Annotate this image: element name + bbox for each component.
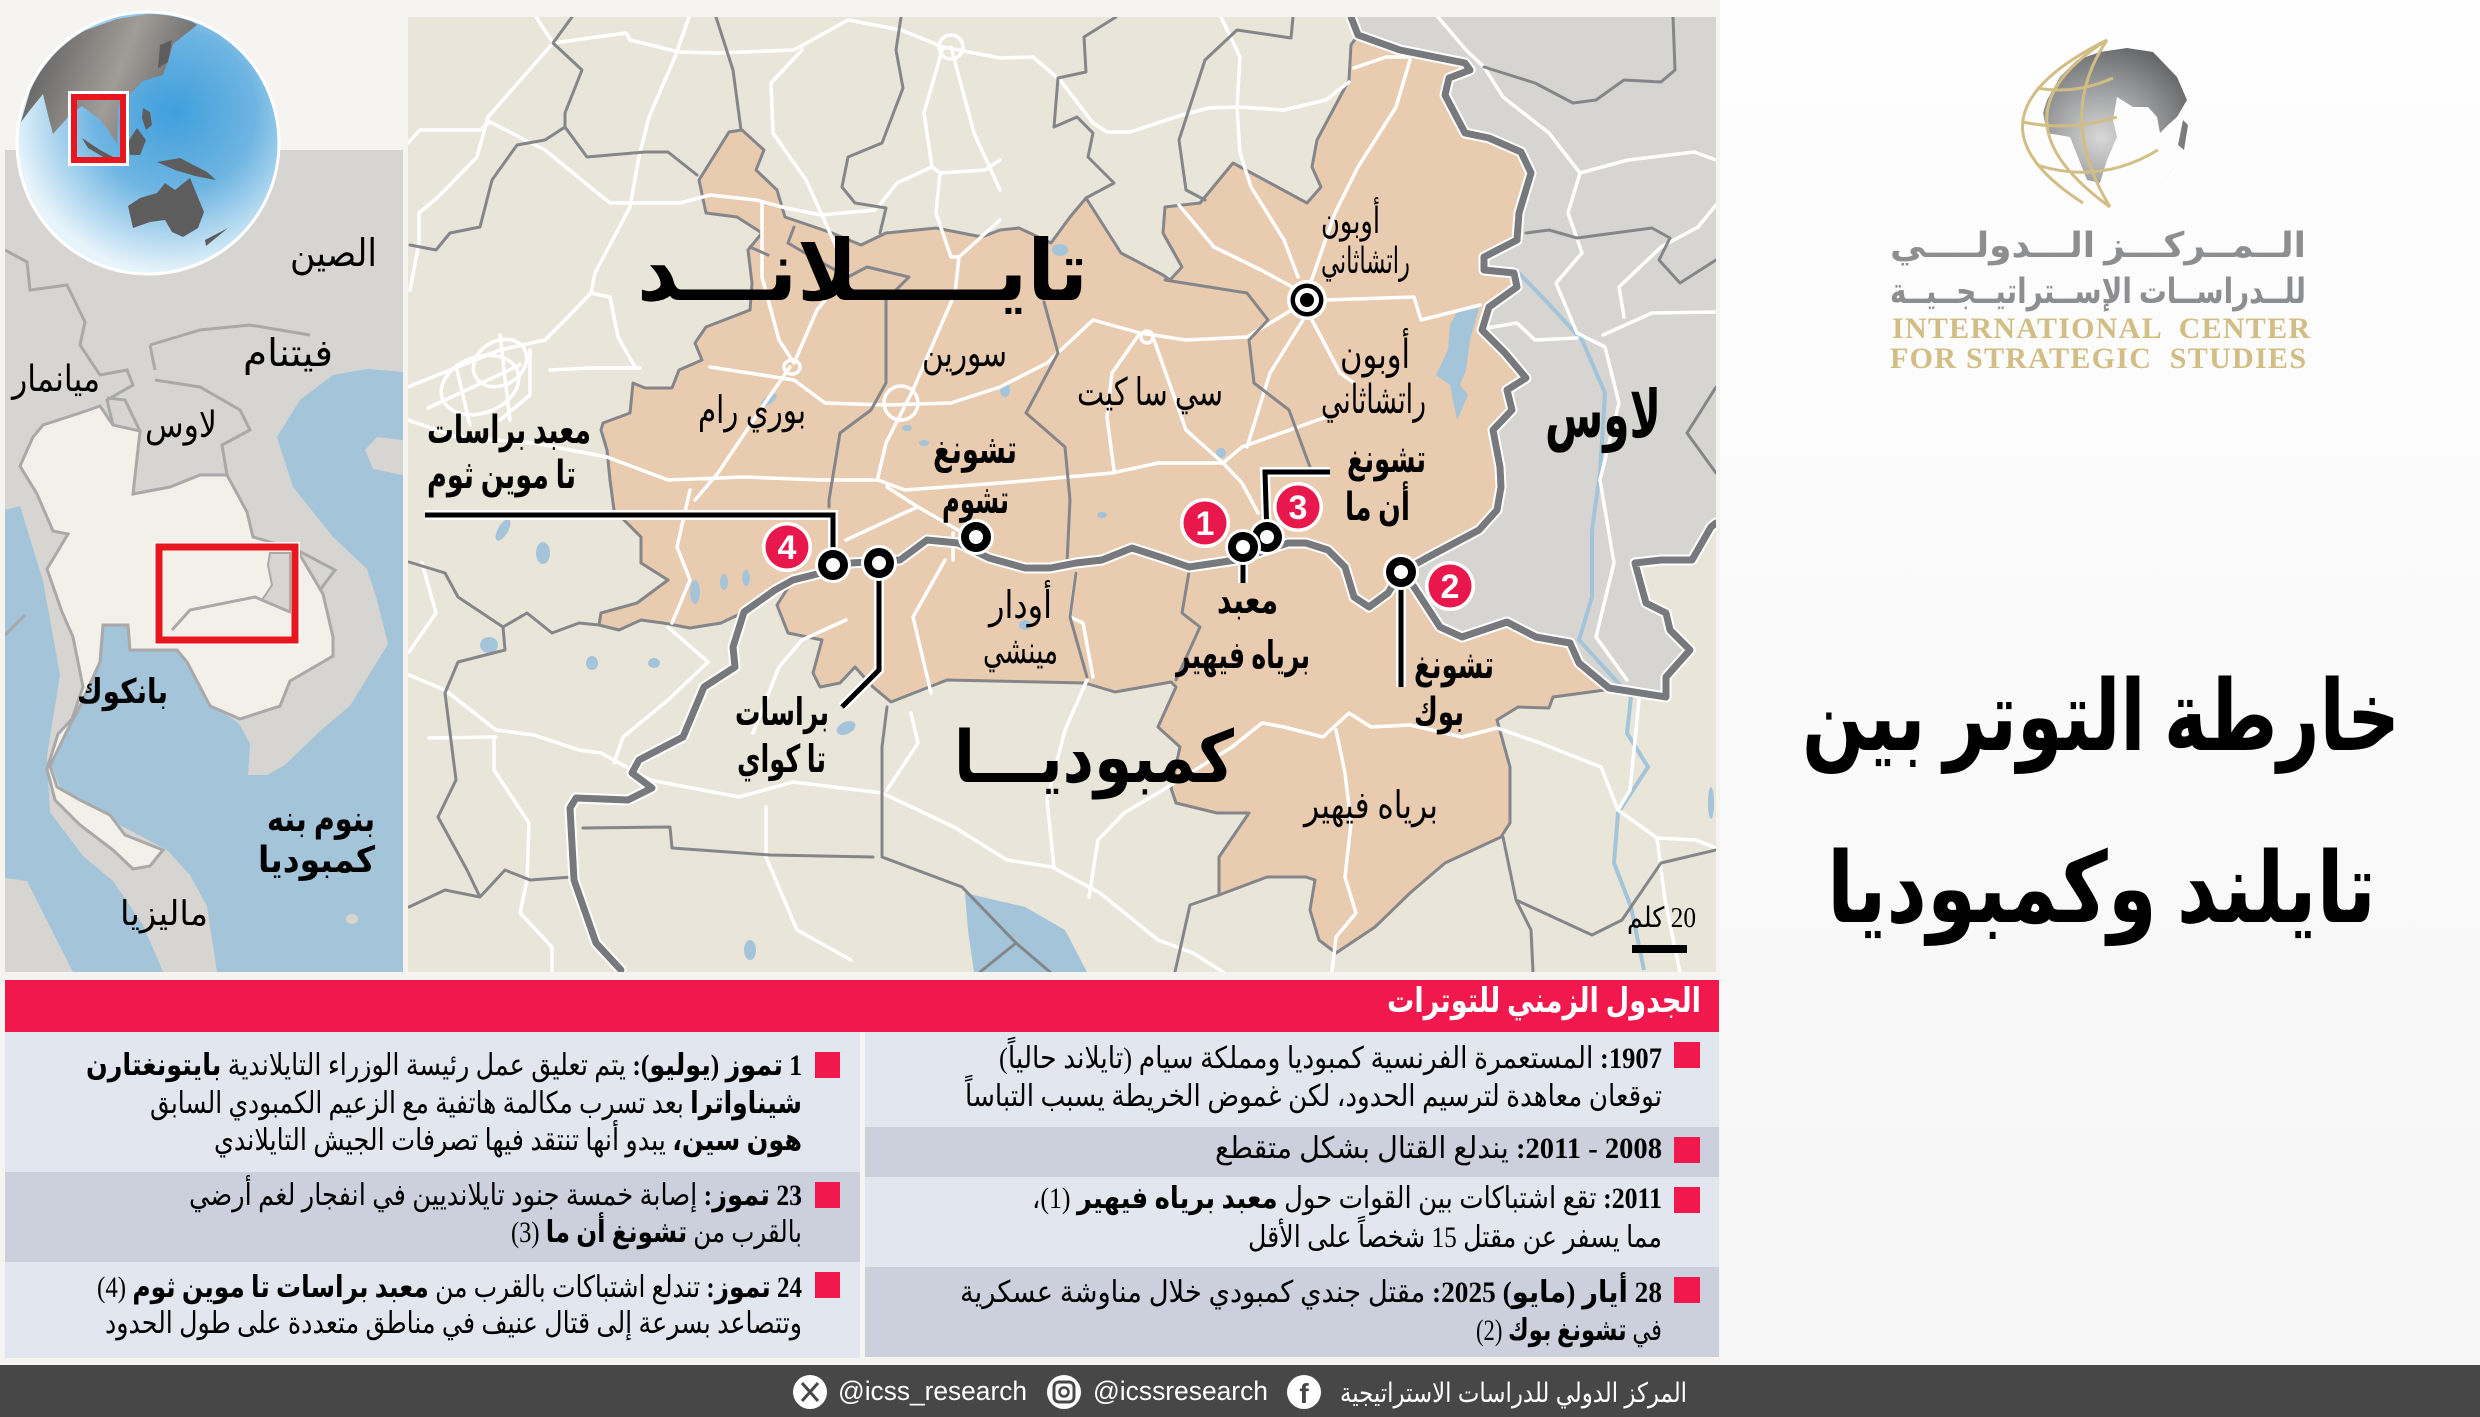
entry: 2008-2011: 2008 - 2011: يندلع القتال بشكل متقطع: [1215, 1132, 1662, 1166]
globe: islands and Australia: [82, 40, 228, 246]
footer: instagram handle: @icssresearch: [1093, 1376, 1268, 1406]
entry: 23 July: بالقرب من تشونغ أن ما (3): [511, 1212, 802, 1249]
scale bar: 20 كلم: [1627, 903, 1696, 934]
entry: 24 July: وتتصاعد بسرعة إلى قتال عنيف في مناطق متعددة على طول الحدود: [105, 1307, 802, 1341]
entry: 1 July: [5, 1032, 860, 1172]
ICSS logo: [1890, 40, 2310, 375]
map label: Prasat Ta Muen Thom temple: معبد براسات: [427, 409, 591, 453]
footer bar: [0, 1365, 2480, 1417]
map label: Prasat Ta Kwai: براسات: [735, 692, 829, 734]
pin: Prasat Ta Muen Thom: [815, 547, 851, 583]
icon: instagram: [1047, 1375, 1081, 1409]
map label: Ubon Ratchathani city: [1321, 197, 1410, 282]
entry: 23 July: [5, 1172, 860, 1262]
entry: 28 May 2025: 28 أيار (مايو) 2025: مقتل جندي كمبودي خلال مناوشة عسكرية: [960, 1272, 1662, 1310]
map label: Cambodia: كمبوديـــا: [954, 718, 1234, 800]
map label: Chong An Ma: أن ما: [1345, 481, 1410, 529]
map label: Prasat Ta Kwai: [735, 692, 829, 781]
logo: Arabic name: [1890, 226, 2306, 312]
map label: Ubon Ratchathani province: راتشاثاني: [1321, 377, 1426, 423]
map label: Ubon Ratchathani city: راتشاثاني: [1321, 241, 1410, 282]
inset: locator rectangle: [157, 545, 297, 642]
footer: X handle: @icss_research: [838, 1376, 1027, 1406]
map label: Surin: سورين: [922, 333, 1007, 376]
icon: X: [793, 1375, 827, 1409]
map label: Chong Chom: تشوم: [942, 477, 1009, 523]
inset label: Laos: لاوس: [145, 405, 217, 446]
inset locator map: [5, 150, 403, 972]
entry: 1907: [865, 1032, 1719, 1127]
map label: Chong Chom: تشونغ: [933, 427, 1017, 473]
inset: Hainan and Vietnam details: [365, 437, 403, 475]
footer: Arabic centre name: المركز الدولي للدراسات الاستراتيجية: [1340, 1378, 1687, 1409]
map: lakes: [480, 244, 1714, 972]
entry: 1907: 1907: المستعمرة الفرنسية كمبوديا ومملكة سيام (تايلاند حالياً): [999, 1036, 1662, 1076]
map label: Prasat Ta Muen Thom temple: تا موين ثوم: [427, 454, 576, 498]
pin: Chong An Ma: [1249, 519, 1285, 555]
globe: [15, 10, 279, 274]
map label: Ubon Ratchathani city: أوبون: [1321, 197, 1380, 242]
map: roads: [408, 17, 1716, 972]
timeline header bar: [5, 980, 1719, 1032]
map: national borders: [570, 17, 1716, 970]
scale bar: [1627, 903, 1696, 953]
entry: 28 May 2025: في تشونغ بوك (2): [1476, 1314, 1662, 1348]
logo: Arabic name: للــدراســات الإســتراتيــجــيــة: [1890, 272, 2306, 312]
leader lines: [425, 472, 1401, 707]
entry: 1 July: شيناواترا بعد تسرب مكالمة هاتفية مع الزعيم الكمبودي السابق: [150, 1087, 802, 1121]
globe: locator rectangle: [70, 93, 127, 164]
main title: [1802, 664, 2400, 947]
icon: facebook: f: [1299, 1378, 1309, 1409]
map label: Chong Bok: [1414, 644, 1494, 735]
globe: Asia landmass: [15, 10, 197, 144]
inset label: Bangkok: بانكوك: [77, 674, 168, 712]
entry: 2011: 2011: تقع اشتباكات بين القوات حول معبد برياه فيهير (1)،: [1032, 1182, 1662, 1216]
inset label: Malaysia: ماليزيا: [120, 896, 208, 934]
entry: 1907: توقعان معاهدة لترسيم الحدود، لكن غموض الخريطة يسبب التباساً: [965, 1074, 1662, 1114]
pin: Chong Bok: [1383, 554, 1419, 590]
logo: English name: FOR STRATEGIC STUDIES: [1890, 342, 2306, 375]
map: highlighted Thai provinces: [599, 35, 1531, 630]
logo: globe: [2022, 40, 2188, 207]
map label: Preah Vihear temple: [1174, 597, 1308, 678]
inset label: Vietnam: فيتنام: [243, 333, 333, 375]
map label: Chong Bok: تشونغ: [1414, 644, 1494, 688]
map label: Chong An Ma: تشونغ: [1347, 438, 1426, 482]
pin: Preah Vihear temple: [1225, 529, 1261, 565]
logo: English name: [1890, 312, 2310, 375]
pin: Prasat Ta Kwai: [861, 545, 897, 581]
entry: 24 July: 24 تموز: تندلع اشتباكات بالقرب من معبد براسات تا موين ثوم (4): [97, 1271, 802, 1305]
map label: Ubon Ratchathani province: أوبون: [1340, 328, 1410, 378]
entry: 2008-2011: [865, 1127, 1719, 1177]
entry: 24 July: [5, 1262, 860, 1358]
Ubon city marker: [1287, 280, 1327, 320]
main map: [408, 17, 1716, 972]
inset label: Myanmar: ميانمار: [10, 359, 100, 400]
map label: Preah Vihear temple: معبد: [1217, 580, 1278, 622]
map label: Ubon Ratchathani province: [1321, 328, 1426, 423]
badge 3: 3: [1289, 489, 1307, 527]
map label: Preah Vihear temple: برياه فيهير: [1175, 635, 1310, 677]
map label: Thailand: تايـــــلانـــد: [637, 226, 1088, 319]
badge 4: 4: [778, 529, 797, 567]
map: Laos territory: [1351, 17, 1716, 697]
map label: Laos: لاوس: [1545, 379, 1661, 454]
badge 4: [762, 522, 812, 572]
timeline: right column: [865, 1032, 1719, 1357]
map label: Prasat Ta Muen Thom temple: [427, 409, 591, 498]
map label: Si Sa Ket: سي سا كيت: [1077, 372, 1223, 414]
timeline: left column: [5, 1032, 860, 1358]
entry: 1 July: 1 تموز (يوليو): يتم تعليق عمل رئيسة الوزراء التايلاندية بايتونغتارن: [86, 1049, 802, 1083]
icon: facebook: [1287, 1375, 1321, 1409]
entry: 2011: [865, 1177, 1719, 1267]
map: city ring roads: [408, 35, 1153, 425]
logo: Arabic name: الــمــركـــز الـــدولــــي: [1890, 226, 2306, 266]
map label: Buri Ram: بوري رام: [698, 390, 806, 433]
map label: Oddar Meanchey: أودار: [987, 580, 1052, 628]
timeline header bar: الجدول الزمني للتوترات: [1387, 983, 1701, 1021]
map: rivers: [1514, 268, 1648, 970]
entry: 2011: مما يسفر عن مقتل 15 شخصاً على الأقل: [1248, 1215, 1662, 1254]
map label: Oddar Meanchey: [983, 580, 1058, 672]
badge 1: [1180, 498, 1230, 548]
map: province borders: [409, 17, 1716, 972]
map: highlighted Cambodian provinces: [777, 540, 1605, 953]
map label: Chong Bok: بوك: [1414, 691, 1464, 735]
logo: English name: INTERNATIONAL CENTER: [1892, 312, 2310, 345]
map label: Prasat Ta Kwai: تا كواي: [737, 739, 826, 781]
map label: Chong An Ma: [1347, 448, 1424, 526]
inset label: Cambodia: كمبوديا: [258, 840, 375, 881]
entry: 1 July: هون سين، يبدو أنها تنتقد فيها تصرفات الجيش التايلاندي: [214, 1119, 802, 1158]
map label: Chong Chom: [934, 439, 1015, 523]
badge 2: [1425, 561, 1475, 611]
badge 3: [1273, 482, 1323, 532]
badge 2: 2: [1441, 568, 1459, 606]
map label: Preah Vihear province: برياه فيهير: [1302, 785, 1438, 828]
entry: 28 May 2025: [865, 1267, 1719, 1357]
inset: sea: [5, 369, 403, 972]
entry: 23 July: 23 تموز: إصابة خمسة جنود تايلانديين في انفجار لغم أرضي: [189, 1174, 802, 1213]
map label: Oddar Meanchey: مينشي: [983, 630, 1058, 672]
badge 1: 1: [1196, 505, 1214, 543]
inset label: Phnom Penh: بنوم بنه: [267, 799, 375, 840]
pin: Chong Chom: [958, 519, 994, 555]
inset label: China: الصين: [290, 233, 377, 276]
inset: Thailand and Cambodia land: [20, 406, 333, 869]
